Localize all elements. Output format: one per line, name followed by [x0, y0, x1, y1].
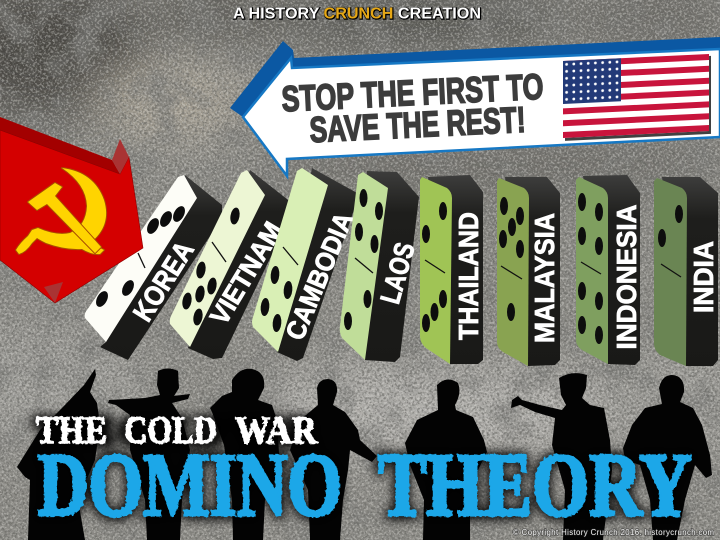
soldier silhouettes	[17, 368, 712, 540]
red communist arrow	[0, 117, 143, 303]
blue arrow callout	[230, 37, 720, 176]
title shadow: THE COLD WAR	[35, 410, 318, 453]
title word: domino: DOMINO	[38, 436, 342, 535]
silhouette: soldier with helmet	[623, 375, 712, 540]
arrow fold tabs	[112, 139, 129, 174]
domino: Vietnam: VIETNAM	[204, 217, 289, 330]
title shadow	[35, 410, 693, 536]
domino: Indonesia: INDONESIA	[611, 204, 642, 350]
silhouette: officer pointing	[511, 373, 612, 540]
title shadow: DOMINO	[37, 434, 343, 536]
silhouette: soldier with gun	[108, 368, 190, 540]
silhouette: soldier with binoculars	[210, 369, 280, 540]
silhouette: man standing	[405, 379, 487, 540]
arrow slogan: STOP THE FIRST TO	[281, 66, 544, 119]
icon: hammer and sickle	[16, 168, 106, 254]
domino: Vietnam	[170, 170, 292, 359]
header credit: A HISTORY CRUNCH CREATION	[233, 6, 481, 22]
domino: Cambodia	[252, 168, 359, 361]
silhouette: man with hand on hip	[290, 379, 377, 540]
domino: Laos	[340, 171, 421, 362]
icon: US flag	[563, 54, 711, 141]
domino: India: INDIA	[688, 241, 719, 313]
domino: India	[654, 177, 719, 366]
copyright: © Copyright History Crunch 2016. historycrunch.com	[513, 528, 714, 537]
domino: Korea: KOREA	[127, 236, 200, 327]
arrow 3D edge	[230, 37, 720, 117]
arrow slogan	[281, 66, 544, 150]
title line: the cold war: WAR	[235, 409, 318, 452]
silhouette: soldier with rifle	[17, 369, 100, 540]
domino: Malaysia	[497, 177, 560, 366]
domino: Thailand: THAILAND	[453, 212, 484, 340]
title line: the cold war: THE	[36, 409, 107, 452]
domino: Malaysia: MALAYSIA	[529, 213, 560, 343]
title	[35, 409, 693, 536]
arrow body	[0, 130, 143, 303]
domino: Thailand	[420, 175, 484, 364]
arrow body	[243, 49, 720, 176]
title line: the cold war	[36, 409, 318, 452]
domino: Cambodia: CAMBODIA	[280, 208, 359, 344]
header credit: A HISTORY CRUNCH CREATION	[234, 6, 482, 23]
copyright: © Copyright History Crunch 2016. historycrunch.com	[513, 528, 714, 537]
arrow top edge	[0, 117, 120, 174]
arrow slogan: SAVE THE REST!	[309, 99, 526, 150]
domino: Indonesia	[576, 175, 642, 365]
title line: the cold war: COLD	[124, 409, 217, 452]
domino: Korea	[85, 175, 222, 360]
domino: Laos: LAOS	[374, 239, 421, 307]
